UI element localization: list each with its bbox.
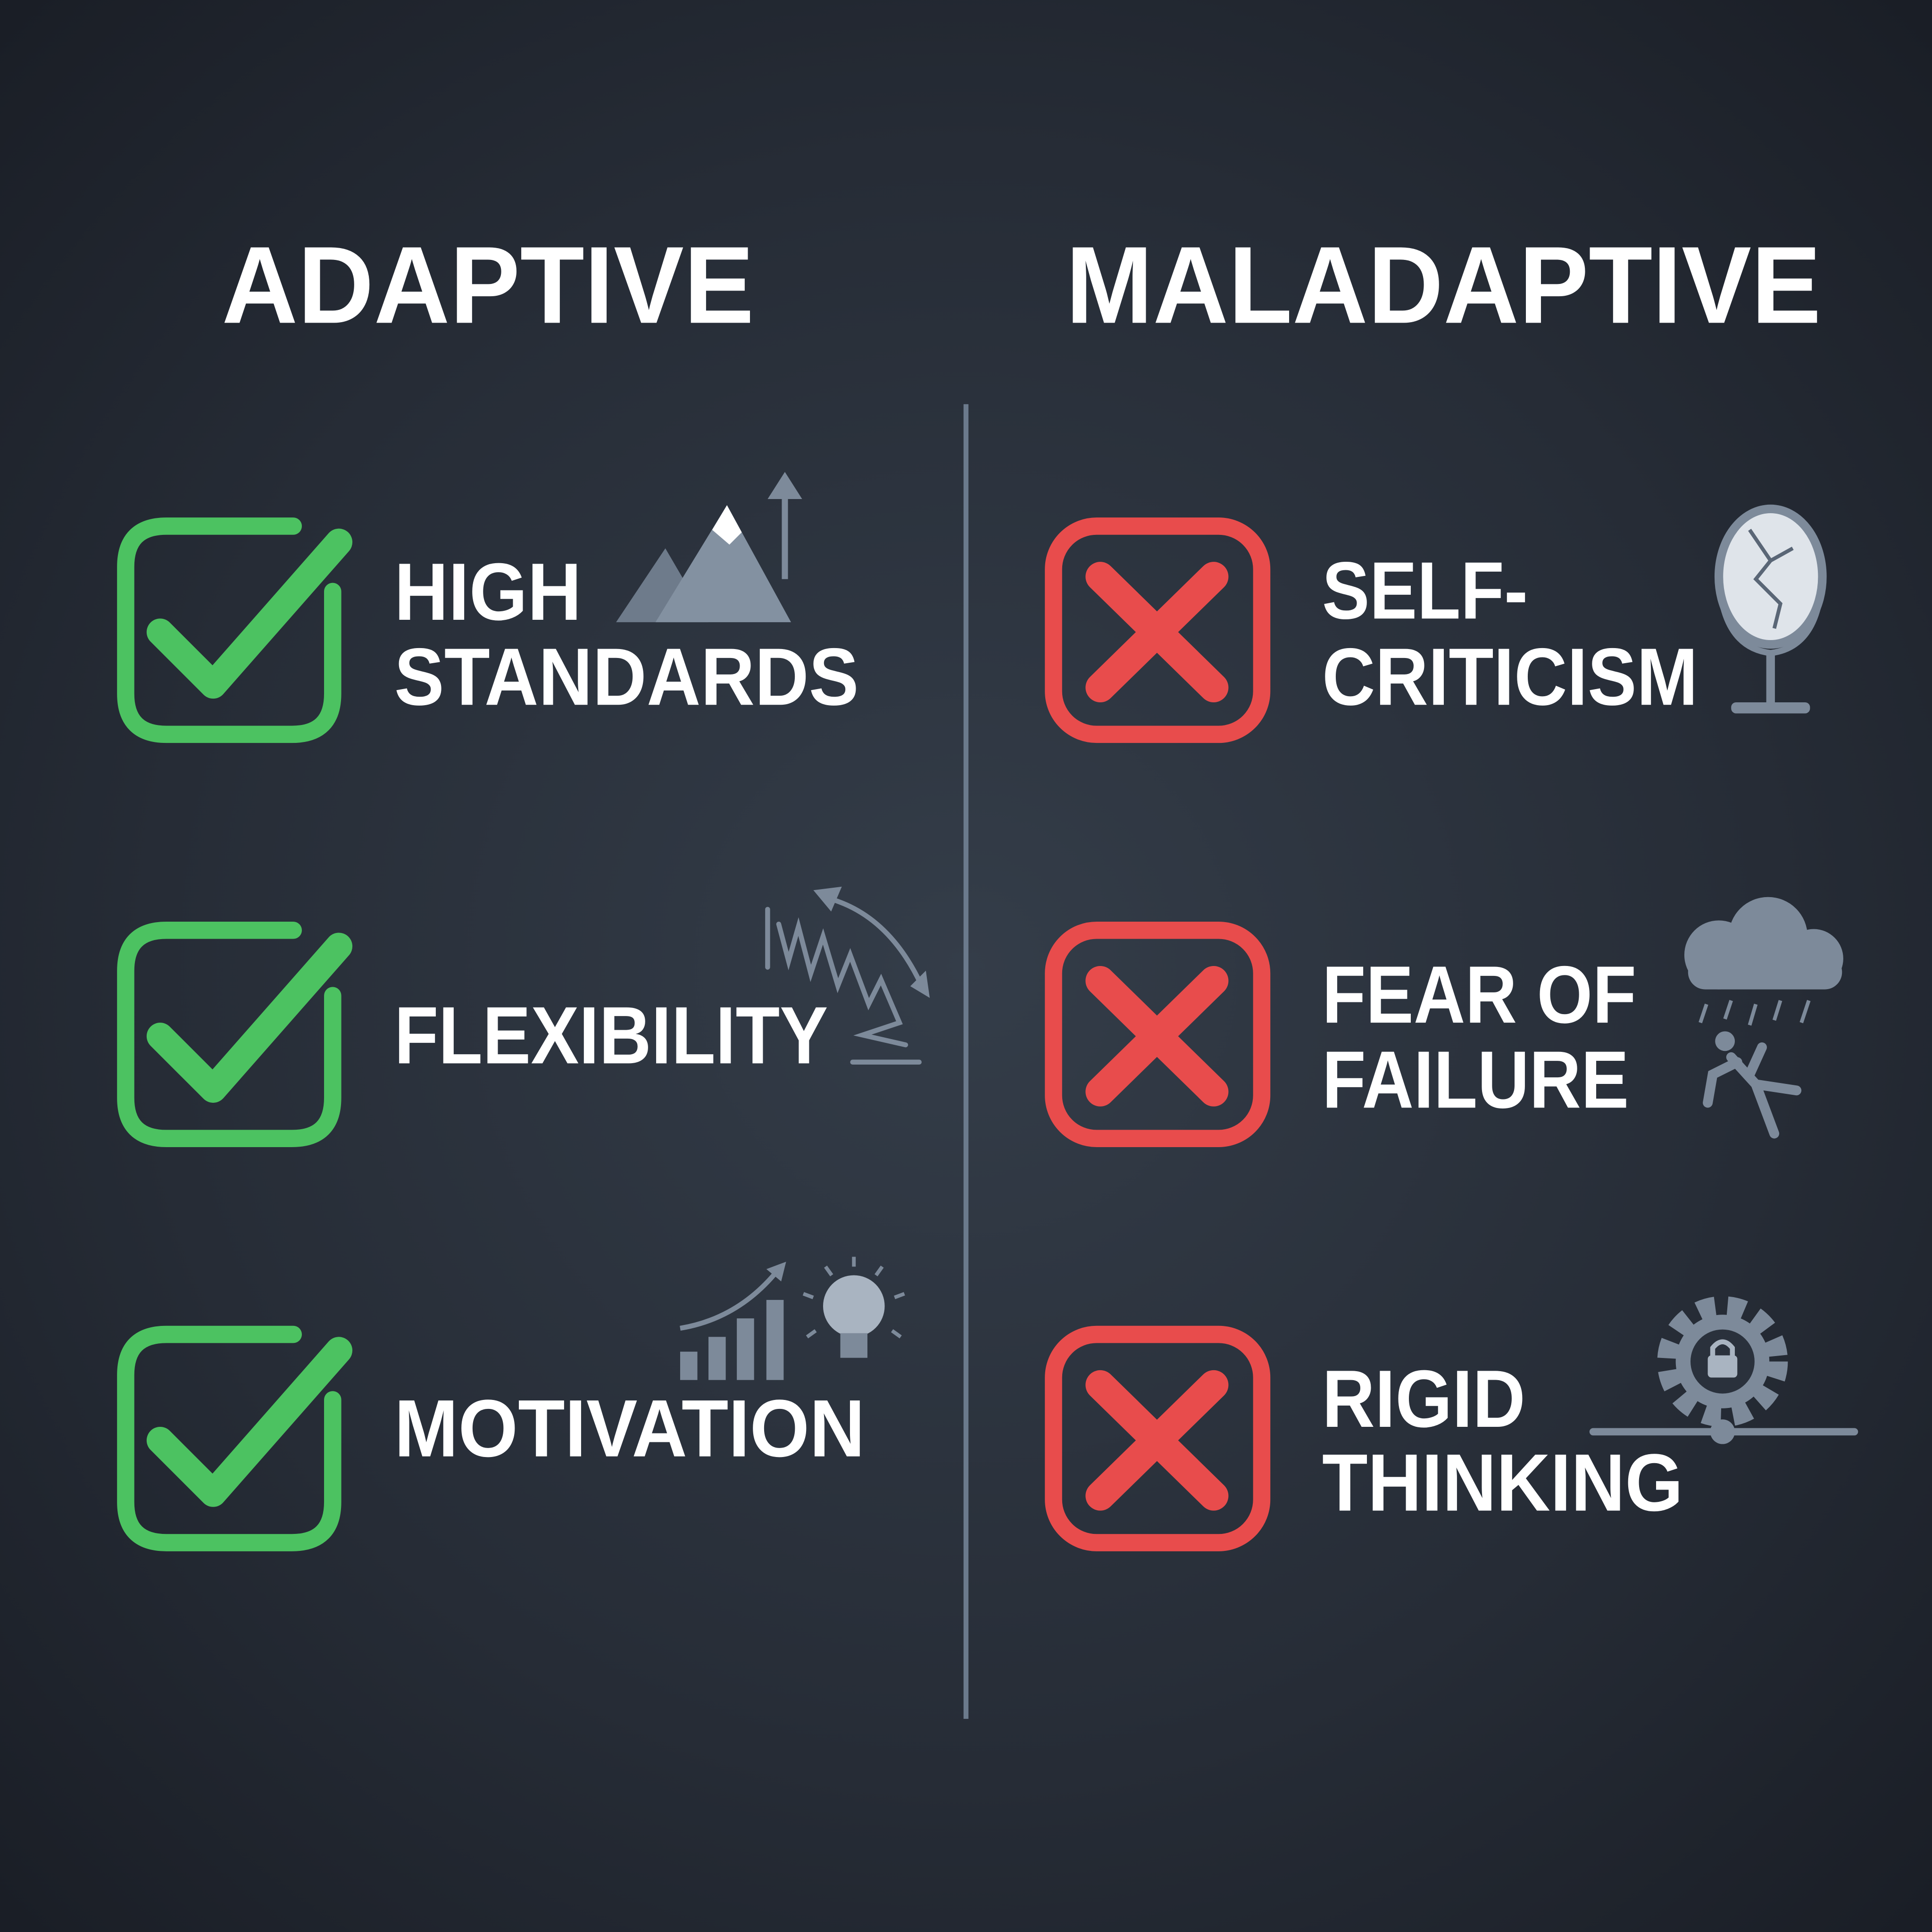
text: high standards — [394, 546, 859, 722]
icon: red x box — [1053, 930, 1262, 1139]
text: flexibility: FLEXIBILITY — [394, 990, 828, 1081]
text: motivation: MOTIVATION — [394, 1383, 865, 1474]
icon: mountain with arrow — [616, 472, 802, 622]
row: rigid thinking — [1053, 1306, 1854, 1543]
icon: spring — [767, 890, 926, 1062]
icon: storm cloud and falling figure — [1684, 897, 1843, 1133]
icon: chart and bulb — [680, 1257, 904, 1380]
icon: green check box — [125, 930, 339, 1139]
text: fear of failure: FAILURE — [1322, 1034, 1629, 1125]
text: self-criticism: CRITICISM — [1322, 631, 1698, 722]
title: adaptive: ADAPTIVE — [222, 224, 754, 346]
icon: gear with lock — [1593, 1306, 1854, 1444]
divider — [965, 404, 967, 1719]
text: rigid thinking: THINKING — [1322, 1437, 1683, 1528]
icon: cracked mirror — [1719, 509, 1823, 713]
row: flexibility — [125, 890, 926, 1139]
text: rigid thinking — [1322, 1353, 1683, 1528]
icon: red x box — [1053, 526, 1262, 734]
row: high standards — [125, 472, 859, 734]
icon: green check box — [125, 1334, 339, 1543]
row: self-criticism — [1053, 509, 1823, 734]
text: rigid thinking: RIGID — [1322, 1353, 1525, 1444]
text: self-criticism — [1322, 545, 1698, 722]
title: maladaptive: MALADAPTIVE — [1066, 224, 1821, 346]
icon: green check box — [125, 526, 339, 734]
text: high standards: STANDARDS — [394, 631, 859, 722]
text: fear of failure: FEAR OF — [1322, 949, 1636, 1040]
row: fear of failure — [1053, 897, 1843, 1139]
text: self-criticism: SELF- — [1322, 545, 1528, 636]
row: motivation — [125, 1257, 904, 1543]
icon: red x box — [1053, 1334, 1262, 1543]
text: fear of failure — [1322, 949, 1636, 1125]
text: high standards: HIGH — [394, 546, 582, 637]
